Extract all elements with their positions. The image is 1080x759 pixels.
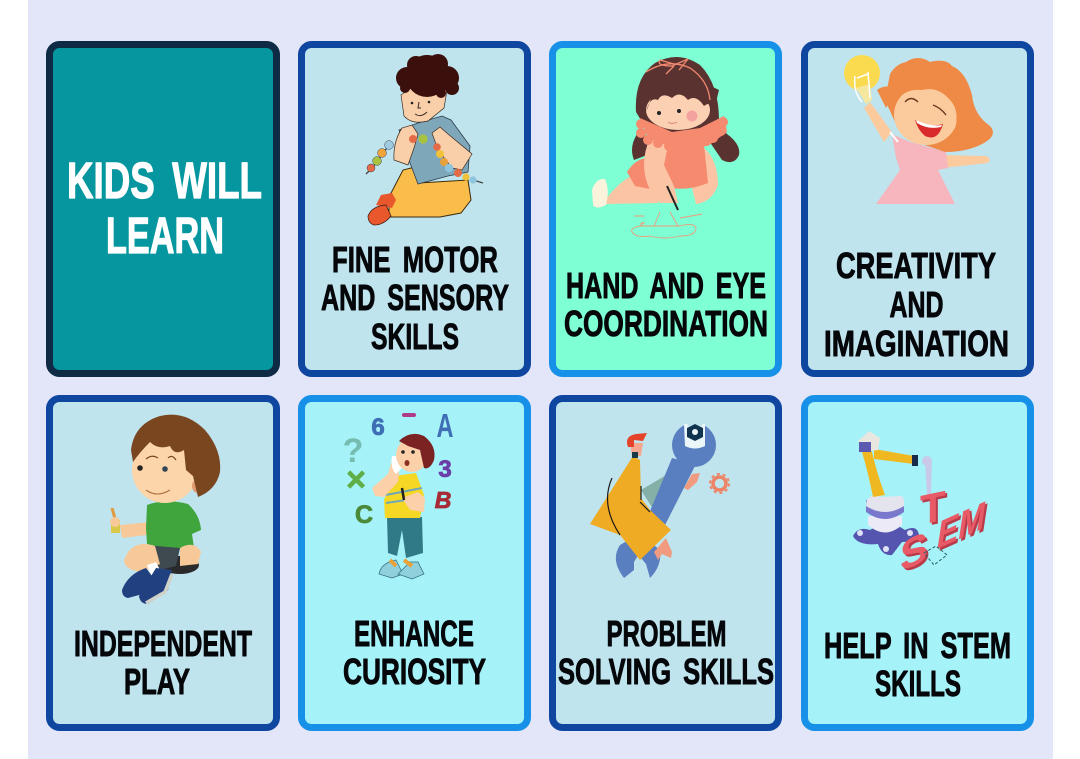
icon: thinking boy with letters and numbers: B: [435, 487, 451, 513]
label: PROBLEM: [606, 613, 726, 654]
label: SKILLS: [875, 663, 961, 704]
icon: boy threading beads: [366, 54, 483, 225]
card: enhance curiosity: [302, 398, 528, 728]
icon: sitting boy: [110, 415, 220, 604]
label: PLAY: [124, 661, 190, 702]
label: FINE MOTOR: [332, 239, 498, 280]
icon: happy girl with light bulb: [844, 55, 993, 204]
card panel: [804, 44, 1030, 374]
icon: thinking boy with letters and numbers: [343, 407, 454, 579]
card panel: [302, 44, 528, 374]
card panel: [552, 44, 778, 374]
icon: robot arm assembling STEM letters: S: [900, 522, 928, 582]
card: hand and eye coordination: [552, 44, 778, 374]
label: AND SENSORY: [321, 277, 509, 318]
label: COORDINATION: [564, 303, 768, 344]
label: [824, 245, 1009, 364]
label: SOLVING SKILLS: [558, 651, 774, 692]
card: problem solving skills: [552, 398, 778, 728]
icon: thinking boy with letters and numbers: ×: [346, 461, 366, 499]
icon: person carrying wrench: [590, 420, 729, 578]
icon: robot arm assembling STEM letters: EM: [939, 496, 988, 560]
heading: [67, 152, 262, 264]
label: [558, 613, 774, 692]
icon: thinking boy with letters and numbers: A: [436, 407, 454, 444]
label: INDEPENDENT: [74, 623, 252, 664]
icon: robot arm assembling STEM letters: S: [902, 524, 930, 584]
card: help in STEM skills: [804, 398, 1030, 728]
icon: robot arm assembling STEM letters: T: [920, 482, 946, 534]
label: CURIOSITY: [343, 651, 486, 692]
heading: LEARN: [106, 207, 224, 264]
heading: KIDS WILL: [67, 152, 262, 209]
card: creativity and imagination: [804, 44, 1030, 374]
card: kids will learn: [50, 44, 276, 374]
card: independent play: [50, 398, 276, 728]
label: [74, 623, 252, 702]
icon: thinking boy with letters and numbers: ?: [343, 432, 363, 470]
icon: girl drawing: [592, 57, 739, 238]
card panel: [302, 398, 528, 728]
label: [824, 625, 1011, 704]
card panel: [50, 398, 276, 728]
label: ENHANCE: [354, 613, 474, 654]
icon: thinking boy with letters and numbers: C: [355, 501, 373, 529]
icon: thinking boy with letters and numbers: 3: [438, 456, 452, 483]
label: IMAGINATION: [824, 323, 1009, 364]
card panel: [50, 44, 276, 374]
icon: robot arm assembling STEM letters: EM: [937, 494, 986, 558]
card panel: [804, 398, 1030, 728]
label: HAND AND EYE: [566, 265, 766, 306]
icon: thinking boy with letters and numbers: 6: [371, 414, 385, 441]
label: [321, 239, 509, 357]
card: fine motor and sensory skills: [302, 44, 528, 374]
icon: robot arm assembling STEM letters: T: [922, 484, 948, 536]
card panel: [552, 398, 778, 728]
label: AND: [890, 284, 944, 325]
label: [343, 613, 486, 692]
label: [564, 265, 768, 344]
label: SKILLS: [371, 316, 459, 357]
label: CREATIVITY: [836, 245, 996, 286]
icon: robot arm assembling STEM letters: [853, 431, 988, 584]
